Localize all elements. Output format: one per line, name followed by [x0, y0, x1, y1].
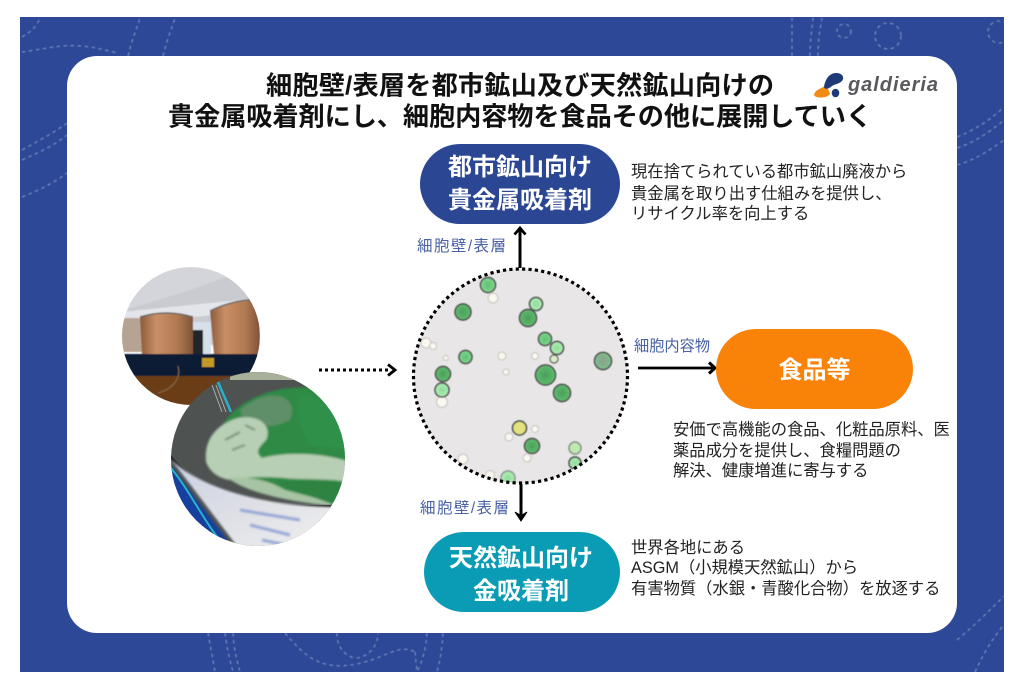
text: natural mine description: 有害物質（水銀・青酸化合物）を放逐する [631, 580, 940, 598]
text: urban mine description: リサイクル率を向上する [631, 205, 809, 223]
white panel [67, 56, 957, 633]
photo: copper culture tanks [120, 265, 265, 408]
title: 貴金属吸着剤にし、細胞内容物を食品その他に展開していく [168, 102, 872, 132]
photo: green algae culture vat [168, 370, 350, 550]
text: natural mine description [631, 539, 940, 598]
pill: urban mine adsorbent [420, 144, 620, 224]
text: urban mine description [631, 163, 907, 223]
arrow: right to food [638, 362, 715, 374]
title [168, 70, 872, 132]
label: cell contents: 細胞内容物 [634, 338, 710, 355]
label: cell wall, top: 細胞壁/表層 [417, 237, 506, 255]
logo: galdieria [814, 73, 938, 98]
dotted arrow: photos to cells [319, 364, 395, 376]
text: natural mine description: ASGM（小規模天然鉱山）から [631, 559, 858, 577]
pill: urban mine adsorbent: 都市鉱山向け [448, 154, 592, 181]
text: urban mine description: 現在捨てられている都市鉱山廃液から [631, 163, 907, 181]
text: food description: 薬品成分を提供し、食糧問題の [673, 442, 901, 460]
microscope image: galdieria cells [410, 265, 632, 487]
pill: urban mine adsorbent: 貴金属吸着剤 [448, 187, 592, 214]
text: food description [673, 421, 950, 480]
text: natural mine description: 世界各地にある [631, 539, 745, 557]
text: urban mine description: 貴金属を取り出す仕組みを提供し、 [631, 185, 892, 203]
arrow: down to natural-mine adsorbent [515, 484, 527, 521]
text: food description: 解決、健康増進に寄与する [673, 462, 868, 480]
pill: natural mine gold adsorbent: 天然鉱山向け [449, 545, 593, 572]
label: cell wall, bottom: 細胞壁/表層 [420, 499, 509, 517]
logo: galdieria: galdieria [847, 74, 938, 96]
title: 細胞壁/表層を都市鉱山及び天然鉱山向けの [266, 70, 774, 100]
pill: food etc: 食品等 [778, 357, 850, 384]
text: food description: 安価で高機能の食品、化粧品原料、医 [673, 421, 950, 439]
arrow: up to urban-mine adsorbent [514, 228, 526, 268]
pill: food etc [716, 329, 913, 409]
pill: natural mine gold adsorbent [424, 532, 620, 612]
pill: natural mine gold adsorbent: 金吸着剤 [473, 578, 569, 605]
